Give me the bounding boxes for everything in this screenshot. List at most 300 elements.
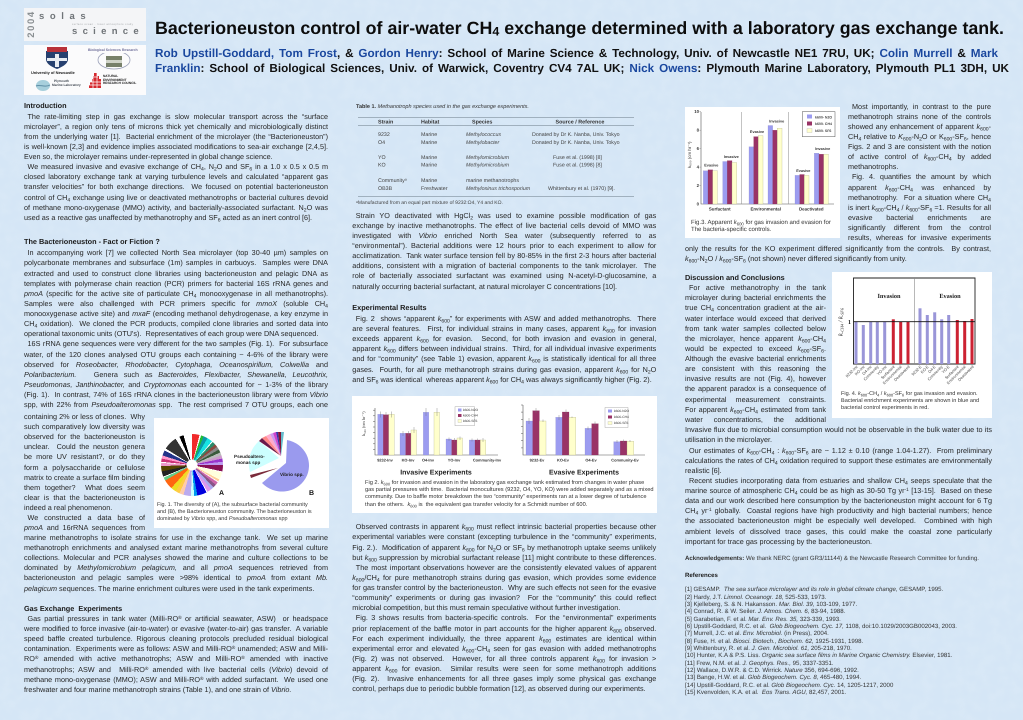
text: most importantly narrow: is inert k600-CH4 / k600-SF6 =1. Results for all — [848, 203, 991, 213]
references list: [3] Kjelleberg, S. & N. Hakansson. Mar. Biol. 39, 103-109, 1977. — [685, 601, 857, 608]
text: bacterioneuston wide: Polaribacterium. Genera such as Bacteroides, Flexibacter, Shewanella, Leucothrix, — [24, 370, 328, 379]
rotated x labels — [844, 364, 975, 385]
heading: References: References — [685, 572, 718, 579]
x labels: O4-Inv — [422, 458, 435, 462]
table 1: methanotroph species — [356, 104, 634, 206]
heading: Gas Exchange Experiments: Gas Exchange Experiments — [24, 604, 122, 613]
text: discussion wide: Invasive flux due to microbial consumption would not be observable in the bulk water due to its — [685, 425, 992, 434]
text: introduction: The rate-limiting step in gas exchange is slow molecular transport across the “surface — [28, 112, 328, 121]
bar group labels: Invasive — [815, 147, 830, 151]
text: discussion narrow: would be expected to exceed k600-SF6. — [685, 344, 826, 354]
text: most importantly wide: k600-N2O / k600-SF6 (not shown) never differed significantly from unity. — [685, 254, 907, 264]
text: strain YO paragraph: role of bacterially associated surfactant was examined using N-acetyl-D-glucosamine, a — [352, 271, 656, 280]
legend — [455, 407, 478, 426]
pie label: Pseudoalteromonas spp: Pseudoaltero- — [234, 454, 265, 459]
label: University of Newcastle: University of Newcastle — [31, 70, 75, 75]
text: discussion wide: ambient levels of dissolved trace gases, this could make the coastal zone particularly — [685, 527, 992, 536]
table rows: Marine — [421, 132, 437, 138]
heading: The Bacterioneuston - Fact or Fiction: The Bacterioneuston - Fact or Fiction ? — [24, 237, 160, 246]
text: discussion narrow: from tank water samples collected below — [685, 324, 826, 333]
text: experimental results: exceeds apparent k600 for evasion. Second, for both invasion and evasion in general, — [352, 334, 656, 345]
text: acknowledgements: Acknowledgements: We thank NERC (grant GR3/11144) & the Newcastle Research Committee for funding. — [685, 555, 979, 562]
text: most importantly narrow: CH4 relative to K600-N2O or K600-SF6, hence — [848, 132, 991, 142]
text: strain YO paragraph: investigated with Vibrio enriched North Sea water (subsequently referred to as — [352, 231, 656, 240]
table header: Source / Reference — [556, 119, 604, 125]
bars: SF6 — [713, 128, 828, 204]
label: NERC: NATURAL — [103, 74, 118, 78]
text: strain YO paragraph — [352, 211, 656, 291]
text: bacterioneuston narrow beside figure 1: observed for the bacterioneuston is — [24, 432, 145, 441]
legend — [605, 408, 629, 428]
x labels: YO-Inv — [448, 458, 461, 462]
text: introduction: We measured invasive and evasive exchange of CH4, N2O and SF6 in a 1.0 x 0.5 x 0.5 m — [28, 162, 328, 173]
legend: k600-SF6 — [614, 421, 628, 425]
text: most importantly narrow: evasive bacterial enrichments are — [848, 213, 991, 222]
pie chart B: bacterioneuston community — [219, 432, 314, 497]
heading: Invasion: Invasion — [877, 293, 901, 300]
text: gas exchange experiments: Gas partial pressures in tank water (Milli-RO® or artificial seawater, ASW) or headspace — [28, 614, 328, 623]
caption: figure 2 — [365, 480, 654, 508]
rotated x labels: YO-Inv — [876, 364, 888, 376]
text: bacterioneuston wide: extracted and used to construct clone libraries using bacterioneuston and pelagic DNA as — [24, 269, 328, 278]
rotated x labels: 9232-E — [910, 364, 923, 377]
text: discussion narrow: water interface would exceed that derived — [685, 314, 826, 323]
text: strain YO paragraph: naturally occurring bacterial surfactant, at natural microlayer C concentrations [10]. — [352, 282, 617, 291]
text: observed contrasts: microbial competition, but this must remain speculative without further investigation. — [352, 603, 620, 612]
legend: k600- N2O — [815, 116, 832, 120]
text: discussion wide: Recent studies incorporating data from estuaries and shallow CH4 seeps speculate that the — [689, 476, 992, 486]
text: bacterioneuston narrow beside figure 1: unclear. Could the neuston genera — [24, 442, 145, 451]
text: strain YO paragraph: exchange by inactive methanotrophs. The effect of live bacterial cells devoid of MMO was — [352, 221, 656, 230]
text: observed contrasts: Fig. 2.). Modification of apparent k600 for N2O or SF6 by methanotroph uptake seems unlikely — [352, 543, 656, 553]
text: bacterioneuston wide: monooxygenase active site) and mxaF (encoding methanol dehydrogenase, a key enzyme in — [24, 309, 328, 318]
table rows — [378, 132, 620, 192]
text: most importantly narrow: Figs. 2 and 3 are consistent with the notion — [848, 142, 991, 151]
chart title: Evasive Experiments: Evasive Experiments — [549, 468, 619, 476]
text: strain YO paragraph: additions, consistent with a migration of bacterial components to the tank microlayer. The — [352, 261, 656, 270]
y axis label: / k — [838, 316, 844, 324]
references list: [14] Upstill-Goddard, R.C. et al. Glob Biogeochem. Cyc. 14, 1205-1217, 2000 — [685, 682, 893, 689]
text: observed contrasts: The most important observations however are the consistently elevated values of apparent — [356, 563, 656, 572]
text: experimental results: are several features. First, for individual strains in many cases, apparent k600 for invasion — [352, 324, 656, 334]
y axis label: -SF6 — [840, 307, 844, 316]
heading: Discussion and Conclusions: Discussion and Conclusions — [685, 273, 785, 282]
caption: figure 1: and (B), the Bacterioneuston community. The bacterioneuston is — [157, 509, 312, 515]
text: gas exchange experiments: methanotrophs; ASW and Milli-RO® amended with live bacterial cells (Vibrio) devoid of — [24, 664, 328, 674]
caption: figure 1: Fig. 1. The diversity of (A), the subsurface bacterial community — [157, 502, 308, 508]
text: introduction: microlayer”, a region only tens of microns thick yet chemically and microbiologically distinct — [24, 122, 328, 131]
text: most importantly narrow: results, whereas for invasive experiments — [848, 233, 991, 242]
table rows: Methylobacter — [466, 140, 500, 146]
table rows: Marine — [421, 163, 437, 169]
chart axes and ticks: 0 — [697, 202, 700, 206]
label: NERC: RESEARCH COUNCIL — [103, 81, 136, 85]
text: bacterioneuston wide continued: methanotroph enrichments and analysed extant marine methanotrophs from several culture — [24, 543, 328, 552]
text: introduction: is well-known [2,3] and evidence implies associated modifications to sea-air exchange [2,4,5]. — [24, 142, 328, 151]
text: observed contrasts: experimental variables were constant (excepting turbulence in the “community” experiments, — [352, 532, 656, 541]
table rows: O4 — [378, 140, 385, 146]
rotated x labels: O4-Inv — [861, 364, 873, 376]
text: gas exchange experiments: speed baffle created turbulence. Rigorous cleaning protocols precluded residual biological — [24, 634, 328, 643]
logo word solas: solas — [39, 10, 91, 22]
text: strain YO paragraph: “environmental”). Bacterial additions were 12 hours prior to each experiment to allow for — [352, 241, 656, 250]
text: discussion narrow: microlayer during bacterial enrichments the — [685, 293, 826, 302]
text: gas exchange experiments: methane mono-oxygenase (MMO); ASW and Milli-RO® with added surfactant. We used one — [24, 675, 328, 684]
text: observed contrasts: for gas transfer control by the bacterioneuston. Why are such effects not seen for the evasive — [352, 583, 656, 592]
x axis labels: Deactivated — [799, 206, 824, 212]
text: bacterioneuston wide — [24, 248, 328, 409]
authors line 2: Franklin: School of Biological Sciences, Univ. of Warwick, Coventry CV4 7AL UK; Nick Owens: Plymouth Marine Laboratory, Plymouth PL1 3DH, UK — [155, 62, 1009, 75]
text: discussion wide: realistic [6]. — [685, 466, 722, 475]
pie label: Vibrio spp: Vibrio spp. — [280, 472, 304, 477]
text: bacterioneuston wide: observed for Roseobacter, Rhodobacter, Cytophaga, Oceanospirillum, Colwellia and — [24, 360, 328, 369]
references list — [685, 586, 957, 696]
text: strain YO paragraph: acclimatization. Tank water surface tension fell by 80-85% in the first 2-3 hours after bacterial — [352, 251, 656, 260]
text: bacterioneuston wide: CH4 oxidation). We cloned the PCR products, compiled clone libraries and sorted data into — [24, 319, 328, 330]
text: introduction — [24, 112, 328, 223]
text: introduction: closed laboratory exchange tank at varying turbulence levels and calculated “apparent gas — [24, 172, 328, 181]
text: bacterioneuston narrow beside figure 1: matrix to create a surface film binding — [24, 473, 145, 482]
bar group labels: Evasive — [796, 169, 810, 173]
x labels — [530, 458, 640, 462]
text: discussion narrow: the apparent paradox is a consequence of — [685, 384, 826, 393]
legend: k600-CH4 — [614, 415, 629, 419]
legend — [802, 112, 835, 137]
text: bacterioneuston wide continued — [24, 533, 328, 592]
text: introduction: used as a reactive gas unaffected by methanotrophy and SF6 acted as an inert control [6]. — [24, 213, 312, 223]
references list: [9] Whittenbury, R. et al. J. Gen. Microbiol. 61, 205-218, 1970. — [685, 645, 852, 652]
text: observed contrasts: but k600 suppression by microbial surfactant release [11] might contribute to these differences. — [352, 553, 656, 563]
panel: institution logos — [24, 45, 146, 95]
logo: solas science 2004 — [24, 8, 146, 41]
chart axes and ticks: k₆₀₀ (cm hr⁻¹) — [687, 141, 692, 168]
text: bacterioneuston wide continued: collections. Molecular and PCR analyses showed the marine and culture collections to be — [24, 553, 328, 562]
text: gas exchange experiments: RO® amended with active methanotrophs; ASW and Milli-RO® amended with inactive — [24, 654, 328, 663]
legend: k600-N2O — [614, 409, 629, 413]
table header: Species — [472, 119, 492, 125]
caption: figure 4 — [841, 390, 979, 411]
y axis label: -CH4 — [840, 324, 844, 333]
heading: Experimental Results: Experimental Results — [352, 303, 427, 312]
title: Bacterioneuston control of air-water CH4 exchange determined with a laboratory gas exchange tank. — [155, 18, 1004, 38]
rotated x labels: Surfactant — [880, 364, 896, 380]
text: bacterioneuston wide: water, of the 120 clones analysed OTU groups each containing ~ 4-6% of the library were — [24, 350, 328, 359]
rotated x labels: KO-Inv — [854, 364, 866, 376]
text: bacterioneuston narrow beside figure 1: be more UV resistant?, or do they — [24, 452, 145, 461]
text: observed contrasts: k600/CH4 for pure methanotroph strains during gas evasion, which provides some evidence — [352, 573, 656, 583]
logo year: 2004 — [26, 10, 37, 38]
chart axes and ticks: 4 — [697, 164, 700, 170]
references list: [6] Upstill-Goddard, R.C. et al. Glob Biogeochem. Cyc. 17, 1108, doi:10.1029/2003GB002043, 2003. — [685, 623, 957, 630]
rotated x labels: O4-E — [927, 364, 937, 374]
text: most importantly narrow: methanotrophs. — [848, 162, 898, 171]
text: discussion wide: Our estimates of k600-CH4 : k600-SF6 are ~ 1.12 ± 0.10 (range 1.04-1.27). From preliminary — [689, 446, 992, 456]
text: observed contrasts: prior replacement of the baffle motor in part accounts for the higher apparent k600 observed. — [352, 624, 656, 634]
table rows: Donated by Dr K. Nanba, Univ. Tokyo — [532, 132, 620, 138]
legend: k600-CH4 — [463, 414, 478, 418]
text: discussion wide: data and our work described here consumption by the bacterioneuston might account for 6 Tg — [685, 496, 992, 505]
icon: University of Newcastle shield — [46, 47, 68, 69]
text: gas exchange experiments: were modified to force invasive (air-to-water) or evasive (water-to-air) gas transfer. A variable — [24, 624, 328, 633]
x axis labels — [709, 206, 824, 212]
table footnote: Manufactured from an equal part mixture of 9232:O4, Y4 and KO. — [358, 200, 503, 206]
text: experimental results — [352, 314, 656, 385]
text: discussion wide: CH4 yr-1 globally. Coastal regions have high productivity and high bacterial numbers; hence — [685, 506, 992, 517]
references list: [8] Fuse, H. et al. Biosci. Biotech., Biochem. 62, 1925-1931, 1998. — [685, 638, 863, 645]
text: most importantly narrow: of active control of k600-CH4 by added — [848, 152, 991, 163]
pie letter A: A — [219, 490, 224, 497]
table rows: marine methanotrophs — [466, 178, 519, 184]
table caption: Table 1. Methanotroph species used in the gas exchange experiments. — [356, 104, 529, 110]
text: bacterioneuston wide: spp, with 22% from Pseudoalteromonas spp. The rest comprised 7 OTU groups, each one — [24, 400, 328, 409]
text: bacterioneuston wide: templates with polymerase chain reaction (PCR) primers for bacterial 16S rRNA genes and — [24, 279, 328, 288]
bars: CH4 — [708, 130, 824, 204]
text: bacterioneuston wide: In accompanying work [7] we collected North Sea microlayer (top 30-40 µm) samples on — [28, 248, 328, 257]
text: gas exchange experiments: contamination. Experiments were as follows: ASW and Milli-RO® unamended; ASW and Milli- — [24, 644, 328, 653]
table rows: Fuse et al. (1998) [8] — [553, 155, 602, 161]
text: observed contrasts: experimental error and elevated k600-CH4 seen for gas evasion with added methanotrophs — [352, 644, 656, 654]
rotated x labels: Community — [926, 364, 944, 382]
text: discussion narrow: For active methanotrophy in the tank — [689, 283, 826, 292]
references list: [12] Wallace, D.W.R. & C.D. Wirrick. Nature 356, 694-696, 1992. — [685, 667, 859, 674]
table footnote: a — [356, 200, 358, 204]
text: bacterioneuston wide: (Fig. 1). In contrast, 74% of 16S rRNA clones in the bacterioneuston library were from Vibrio — [24, 390, 328, 399]
text: introduction: from the underlying water [1]. Bacterial enrichment of the microlayer (the “Bacterioneuston”) — [24, 132, 328, 141]
caption: figure 4: Fig. 4. k600-CH4 / k600-SF6 for gas invasion and evasion. — [841, 390, 978, 397]
label: Plymouth Marine Laboratory: Marine Laboratory — [52, 83, 81, 87]
x labels: Community-Inv — [473, 458, 502, 462]
text: discussion narrow: For apparent k600-CH4 estimated from tank — [685, 405, 826, 415]
table rows: Methylococcus — [466, 132, 501, 138]
text: bacterioneuston wide: Samples were also challenged with PCR primers specific for mmoX (soluble CH4 — [24, 299, 328, 309]
text: gas exchange experiments — [24, 614, 328, 694]
text: bacterioneuston wide continued: bacterioneuston and pelagic samples were >98% identical to pmoA from extant Mb. — [24, 573, 328, 582]
panel: figure 3 bar chart — [685, 107, 840, 238]
table header — [378, 119, 604, 125]
text: discussion wide: calculations the rates of CH4 oxidation required to support these estimates are environmentally — [685, 456, 992, 466]
text: most importantly narrow: apparent k600-CH4 was enhanced by — [848, 183, 991, 193]
legend: k600- SF6 — [815, 129, 831, 133]
caption: figure 3: Fig.3. Apparent k600 for gas invasion and evasion for — [691, 220, 831, 226]
rotated x labels: YO-E — [940, 364, 951, 374]
x labels: KO-Inv — [402, 458, 415, 462]
text: discussion narrow: true CH4 concentration gradient at the air- — [685, 303, 826, 314]
references list: [1] GESAMP. The sea surface microlayer and its role in global climate change, GESAMP, 1995. — [685, 586, 943, 593]
pie letter B: B — [309, 490, 314, 497]
table rows: KO — [378, 163, 386, 169]
text: bacterioneuston wide: operational taxonomic units (OTU's). Representatives of each group were DNA sequenced. — [24, 329, 318, 338]
table header: Strain — [378, 119, 393, 125]
table rows: Whittenbury et al. (1970) [9]. — [548, 186, 615, 192]
icon: Plymouth Marine Laboratory — [36, 80, 50, 91]
table header: Habitat — [421, 119, 439, 125]
text: discussion narrow: Although the evasive bacterial enrichments — [685, 354, 826, 363]
table rows: Fuse et al. (1998) [8] — [553, 163, 602, 169]
chart title: Invasive Experiments: Invasive Experiments — [400, 468, 472, 476]
legend: k600-N2O — [463, 408, 478, 412]
text: observed contrasts: For each experiment individually, the three apparent k600 estimates are identical within — [352, 634, 656, 644]
text: bacterioneuston wide: Pseudomonas, Janthinobacter, and Cryptomonas each accounted for ~ 1-3% of the library — [24, 380, 328, 389]
text: experimental results: and for “community” (see Table 1) evasion, apparent k600 is statistically identical for all three — [352, 354, 656, 365]
text: most importantly narrow: methanotroph strains none of the controls — [848, 112, 991, 121]
caption: figure 4: bacterial control experiments in red. — [841, 405, 929, 411]
rotated x labels: Community — [862, 364, 880, 382]
text: observed contrasts — [352, 522, 656, 693]
rotated x labels: Environmental — [946, 364, 967, 385]
authors line 1: Rob Upstill-Goddard, Tom Frost, & Gordon Henry: School of Marine Science & Technology, Univ. of Newcastle NE1 7RU, UK; Colin Murrell & Mark — [155, 47, 998, 60]
text: experimental results: gases. Fourth, for all pure methanotroph strains during gas evasion, apparent k600 for N2O — [352, 364, 656, 375]
text: bacterioneuston wide continued: marine methanotrophs to isolate strains for use in the exchange tank. We set up marine — [24, 533, 328, 542]
text: introduction: Even so, the microlayer remains under-represented in global change science. — [24, 152, 273, 161]
text: discussion narrow: invasive results are not (Fig. 4), however — [685, 374, 826, 383]
text: observed contrasts: (Fig. 2) was not observed. However, for all three controls apparent k600 for invasion > — [352, 654, 656, 664]
legend: k600- CH4 — [815, 122, 832, 126]
label: Biological Sciences Research: Biological Sciences Research — [88, 48, 138, 52]
label: Plymouth Marine Laboratory: Plymouth — [54, 79, 69, 83]
text: most importantly narrow: Most importantly, in contrast to the pure — [852, 102, 991, 111]
caption: figure 3: The bacteria-specific controls. — [691, 227, 771, 233]
text: discussion narrow: are consistent with this reasoning the — [685, 364, 826, 373]
text: introduction: of methane mono-oxygenase (MMO) activity, and bacterially-associated surfactant. N2O was — [24, 203, 328, 213]
heading: Introduction: Introduction — [24, 101, 67, 110]
table rows: Marine — [421, 178, 437, 184]
text: bacterioneuston narrow beside figure 1: such comparatively low diversity was — [24, 422, 145, 431]
table rows: OB3B — [378, 186, 393, 192]
text: discussion narrow: the microlayer, hence apparent k600-CH4 — [685, 334, 826, 344]
caption: figure 2: gas partial pressures with time. Bacterial monocultures (9232, O4, YO, KO) were added separately and as a mixed — [365, 487, 654, 493]
text: bacterioneuston wide continued: dominated by Methylomicrobium pelagicum, and all pmoA sequences retrieved from — [24, 563, 328, 572]
text: introduction: transfer velocities” for both exchange directions. We focused on potential bacterioneuston — [24, 182, 328, 191]
y axis label: k — [838, 333, 844, 336]
caption: figure 2: community. Due to baffle motor breakdown the two “community” experiments ran at a lower degree of turbulence — [365, 494, 646, 500]
references list: [15] Kvenvolden, K.A. et al. Eos Trans. AGU, 82,457, 2001. — [685, 689, 846, 696]
bars: N2O — [703, 126, 819, 204]
x axis labels: Surfactant — [709, 206, 731, 212]
panel: figure 2 bar charts — [352, 396, 657, 513]
text: experimental results: and SF6 was identical whereas apparent k600 for CH4 was always significantly higher (Fig. 2). — [352, 375, 652, 385]
text: discussion wide: marine source of atmospheric CH4 could be as high as 30-50 Tg yr-1 [13-15]. Based on these — [685, 486, 992, 496]
text: bacterioneuston narrow beside figure 1: indeed a real phenomenon. — [24, 503, 112, 512]
text: bacterioneuston wide: 16S rRNA gene sequences were very different for the two samples (Fig. 1). For subsurface — [28, 339, 328, 348]
text: discussion wide: utilisation in the microlayer. — [685, 435, 772, 444]
caption: figure 2: than the others. k600 is the equivalent gas transfer velocity for a Schmidt number of 600. — [365, 502, 587, 508]
chart axes and ticks: 2 — [697, 183, 700, 188]
logo tagline: surface ocean - lower atmosphere study — [72, 22, 133, 26]
table rows: Donated by Dr K. Nanba, Univ. Tokyo — [532, 140, 620, 146]
references list: [5] Garabetian, F. et al. Mar. Env. Res. 35, 323-339, 1993. — [685, 616, 841, 623]
authors — [155, 47, 1009, 75]
caption: figure 3 — [691, 220, 831, 233]
references list: [11] Frew, N.M. et al. J. Geophys. Res., 95, 3337-3351. — [685, 660, 834, 667]
references list: [7] Murrell, J.C. et al. Env. Microbiol. (in Press), 2004. — [685, 630, 829, 637]
table rows: YO — [378, 155, 386, 161]
text: bacterioneuston narrow beside figure 1: pmoA and 16rRNA sequences from — [24, 523, 145, 532]
table rows: Freshwater — [421, 186, 448, 192]
chart axes and ticks — [687, 109, 834, 206]
caption: figure 4: Bacterial enrichment experiments are shown in blue and — [841, 398, 979, 404]
pie label: Pseudoalteromonas spp: monas spp — [236, 460, 260, 465]
text: experimental results: Fig. 2 shows “apparent k600” for experiments with ASW and added methanotrophs. There — [356, 314, 656, 324]
caption: figure 1: dominated by Vibrio spp, and Pseudoalteromonas spp — [157, 516, 288, 522]
text: discussion narrow — [685, 283, 826, 424]
text: bacterioneuston wide continued: pelagicum sequences. The marine enrichment cultures were used in the tank experiments. — [24, 584, 314, 592]
text: discussion wide: the associated bacterioneuston might be especially well developed. Combined with high — [685, 516, 992, 525]
references list: [2] Hardy, J.T. Limnol. Oceanogr. 18, 525-533, 1973. — [685, 594, 826, 601]
text: strain YO paragraph: Strain YO deactivated with HgCl2 was used to examine possible modification of gas — [356, 211, 656, 221]
text: bacterioneuston narrow beside figure 1 — [24, 412, 146, 532]
icon: research building photo — [98, 53, 130, 70]
chart axes and ticks: 10 — [694, 109, 700, 114]
x labels: O4-Ev — [585, 458, 597, 462]
text: most importantly narrow: Fig. 4. quantifies the amount by which — [852, 172, 991, 181]
text: most importantly narrow: methanotrophy. For a situation where CH4 — [848, 193, 991, 203]
table rows: Marine — [421, 155, 437, 161]
bars: bacterial controls — [892, 319, 974, 364]
rotated x labels: KO-E — [919, 364, 930, 374]
rotated x labels: Deactivated — [893, 364, 911, 382]
bar group labels: Invasive — [769, 119, 784, 123]
text: observed contrasts: Fig. 3 shows results from bacteria-specific controls. For the “environmental” experiments — [356, 613, 656, 622]
rotated x labels: Deactivated — [957, 364, 975, 382]
text: observed contrasts: control, perhaps due to periodic bubble formation [12], as observed during our experiments. — [352, 684, 646, 693]
text: bacterioneuston narrow beside figure 1: We constructed a data base of — [28, 513, 145, 522]
label: Plymouth Marine Laboratory — [52, 79, 81, 87]
table rows: a — [405, 178, 407, 182]
icon: NERC mark — [89, 73, 101, 88]
text: discussion narrow: experimental measurement constraints. — [685, 395, 826, 404]
bar group labels — [704, 119, 830, 173]
chart axes and ticks: 6 — [697, 146, 700, 151]
text: bacterioneuston narrow beside figure 1: form a polysaccharide or cellulose — [24, 463, 145, 472]
slices: minor OTU groups — [259, 432, 284, 456]
slice: Vibrio — [262, 440, 309, 492]
text: most importantly narrow: significantly different from the control — [848, 223, 991, 232]
tick label 1: 1 — [848, 320, 851, 326]
text: bacterioneuston wide: polycarbonate membranes and subsurface (1m) samples in carbuoys. Samples were DNA — [24, 258, 328, 267]
chart: evasive experiments — [521, 405, 645, 462]
text: observed contrasts: “community” experiments or during gas invasion? For the “community” this could reflect — [352, 593, 656, 602]
text: bacterioneuston wide: pmoA (specific for the active site of particulate CH4 monooxygenase in all methanotrophs). — [24, 289, 328, 299]
bar group labels: Evasive — [750, 130, 764, 134]
text: discussion wide: important for trace gas processing by the bacterioneuston. — [685, 537, 872, 546]
pie chart A: subsurface community — [161, 434, 223, 496]
rotated x labels: 9232-Inv — [844, 364, 859, 378]
text: experimental results: apparent k600 differs between individual strains. Third, for all individual invasive experiments — [352, 344, 656, 355]
rotated x labels: Surfactant — [944, 364, 960, 380]
chart axes and ticks: 8 — [697, 128, 700, 132]
references list: [13] Bange, H.W. et al. Glob Biogeochem. Cyc. 8, 465-480, 1994. — [685, 674, 861, 681]
bar group labels: Invasive — [724, 155, 739, 159]
x labels: 9232-Inv — [377, 458, 394, 462]
text: gas exchange experiments: freshwater and four marine methanotroph strains (Table 1), and one strain of Vibrio. — [24, 685, 291, 694]
slice: Pseudoalteromonas — [249, 441, 279, 472]
x labels: Community-Ev — [611, 458, 640, 462]
chart: invasive experiments — [361, 407, 502, 462]
panel: figure 1 pie charts — [154, 418, 329, 528]
table rows: 9232 — [378, 132, 390, 138]
text: most importantly narrow: showed any enhancement of apparent k600- — [848, 122, 991, 132]
table rows: Methylosinus trichosporium — [466, 186, 531, 192]
label: NERC — [103, 74, 136, 85]
x labels: KO-Ev — [557, 458, 570, 462]
text: discussion narrow: water concentrations, the additional — [685, 415, 826, 424]
bars: bacterial enrichment — [854, 308, 950, 364]
legend: k600-SF6 — [463, 419, 477, 423]
y axis label: k₆₀₀ (cm hr⁻¹) — [361, 411, 366, 436]
table rows: Methylomicrobium — [466, 155, 510, 161]
x axis labels: Environmental — [750, 206, 781, 212]
text: discussion wide — [685, 425, 992, 546]
